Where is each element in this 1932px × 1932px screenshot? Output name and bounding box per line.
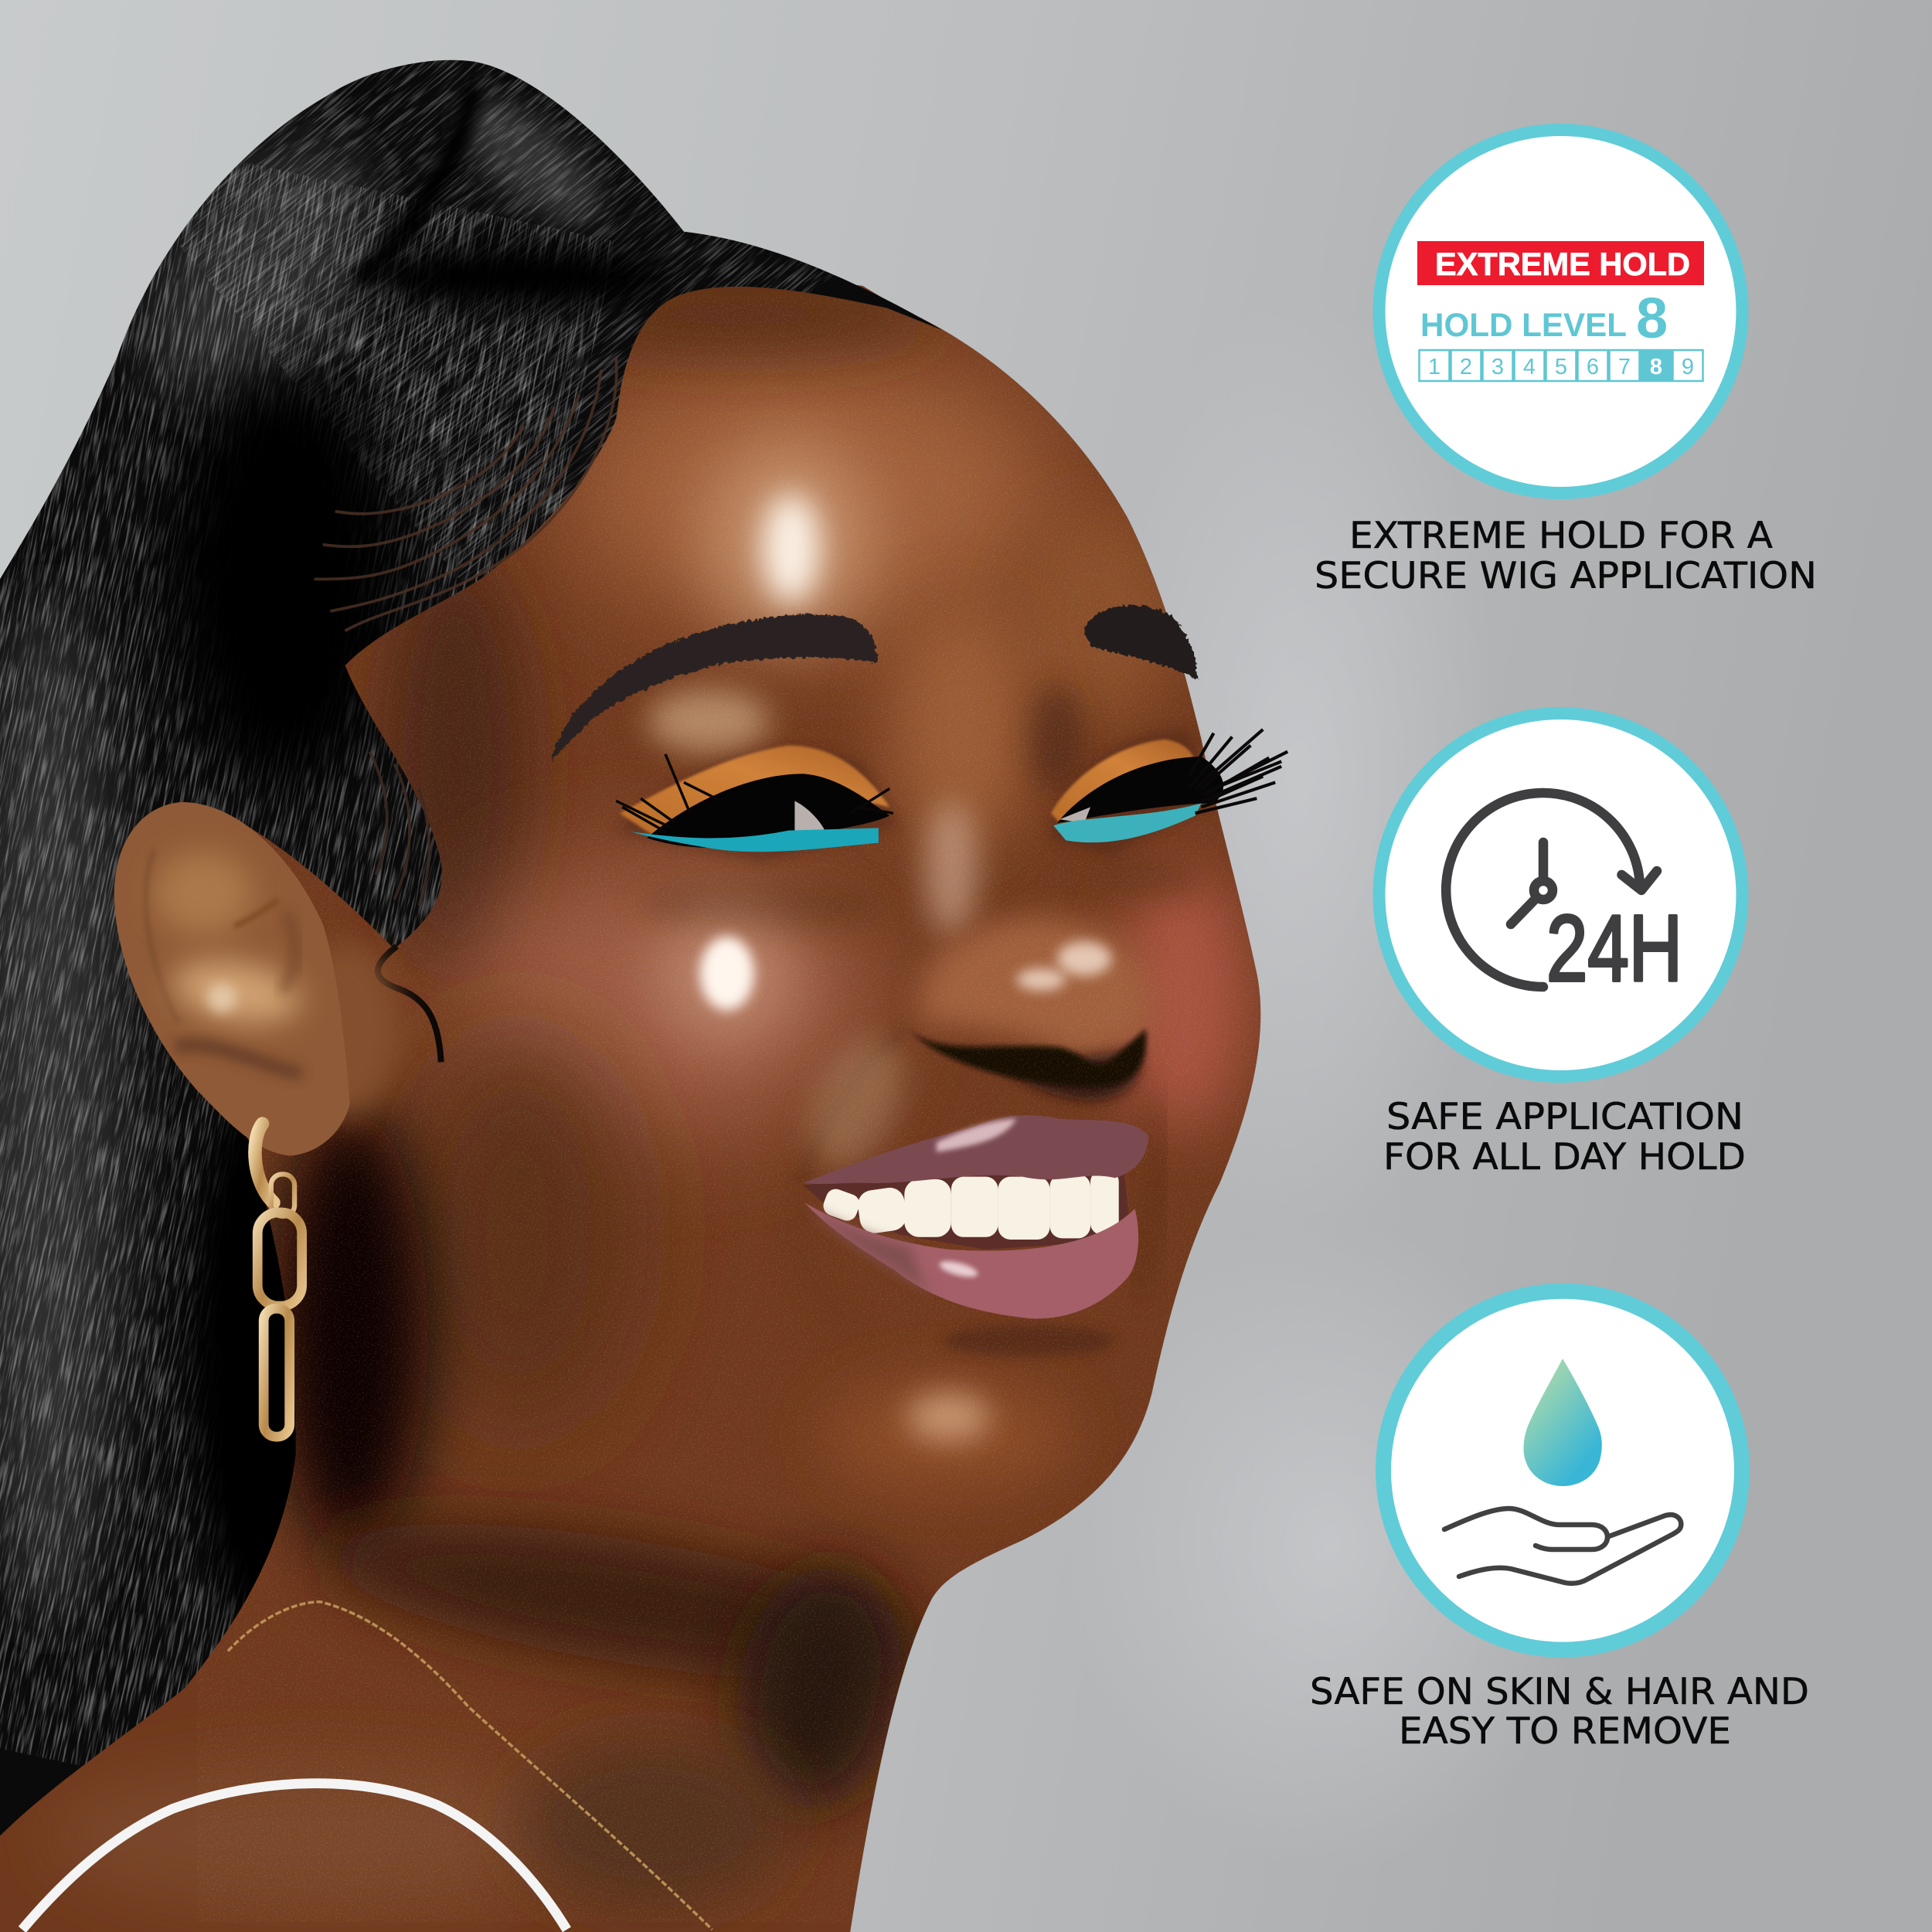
photo: smiling woman	[0, 0, 1287, 1932]
badge: extreme hold	[1379, 130, 1742, 493]
badge: extreme hold: 3	[1492, 355, 1504, 379]
badge: extreme hold: 9	[1682, 355, 1694, 379]
hair: ponytail and slicked hairline	[0, 0, 943, 1836]
red label	[1417, 241, 1704, 285]
mouth: lips and teeth	[804, 1115, 1148, 1318]
24H: 24H	[1546, 896, 1682, 1001]
caption 1	[1315, 515, 1817, 597]
hair curl on cheek	[378, 946, 441, 1062]
caption 2: SAFE APPLICATION	[1386, 1096, 1743, 1138]
caption 2: FOR ALL DAY HOLD	[1383, 1136, 1746, 1179]
hold level: HOLD LEVEL	[1420, 307, 1627, 344]
badge: extreme hold: 4	[1523, 355, 1536, 379]
skin: face, neck and shoulder	[0, 259, 1281, 1932]
icon: open hand	[1444, 1509, 1681, 1583]
caption 3: SAFE ON SKIN & HAIR AND	[1310, 1671, 1809, 1713]
nose	[906, 917, 1149, 1100]
caption 1: EXTREME HOLD FOR A	[1349, 515, 1773, 557]
caption 3	[1310, 1671, 1809, 1753]
caption 2	[1383, 1096, 1746, 1179]
ear	[114, 802, 400, 1156]
badge: extreme hold: 1	[1428, 355, 1440, 379]
badge: extreme hold: 8	[1650, 355, 1662, 379]
badge: extreme hold: 2	[1460, 355, 1472, 379]
badge: extreme hold: 5	[1555, 355, 1567, 379]
right eye	[1047, 730, 1287, 856]
left eye	[616, 746, 900, 862]
caption 1: SECURE WIG APPLICATION	[1315, 555, 1817, 597]
icon: clock with arrow	[1446, 793, 1657, 987]
right eyebrow	[1084, 605, 1198, 680]
nasolabial fold and mouth shadow	[797, 1029, 1157, 1356]
badge: extreme hold: EXTREME HOLD	[1435, 246, 1690, 282]
badge: extreme hold: 7	[1618, 355, 1631, 379]
badge: extreme hold: 6	[1587, 355, 1599, 379]
left eyebrow	[551, 614, 877, 761]
skin texture	[197, 296, 1281, 1922]
hold scale 1 to 9	[1419, 350, 1703, 381]
neck shadow behind the jaw	[275, 1109, 427, 1553]
caption 3: EASY TO REMOVE	[1399, 1710, 1731, 1753]
badge: extreme hold: 8	[1636, 286, 1668, 350]
strap and necklace	[22, 1602, 713, 1930]
baby hairs	[315, 357, 617, 906]
icon: water drop	[1524, 1359, 1602, 1486]
earring: gold chain links	[255, 1124, 302, 1437]
highlights: forehead, brow, cheek and nose	[647, 437, 978, 1181]
badge: 24 hour clock	[1379, 713, 1742, 1077]
badge: safe on skin	[1383, 1291, 1742, 1650]
teeth	[821, 1171, 1119, 1240]
